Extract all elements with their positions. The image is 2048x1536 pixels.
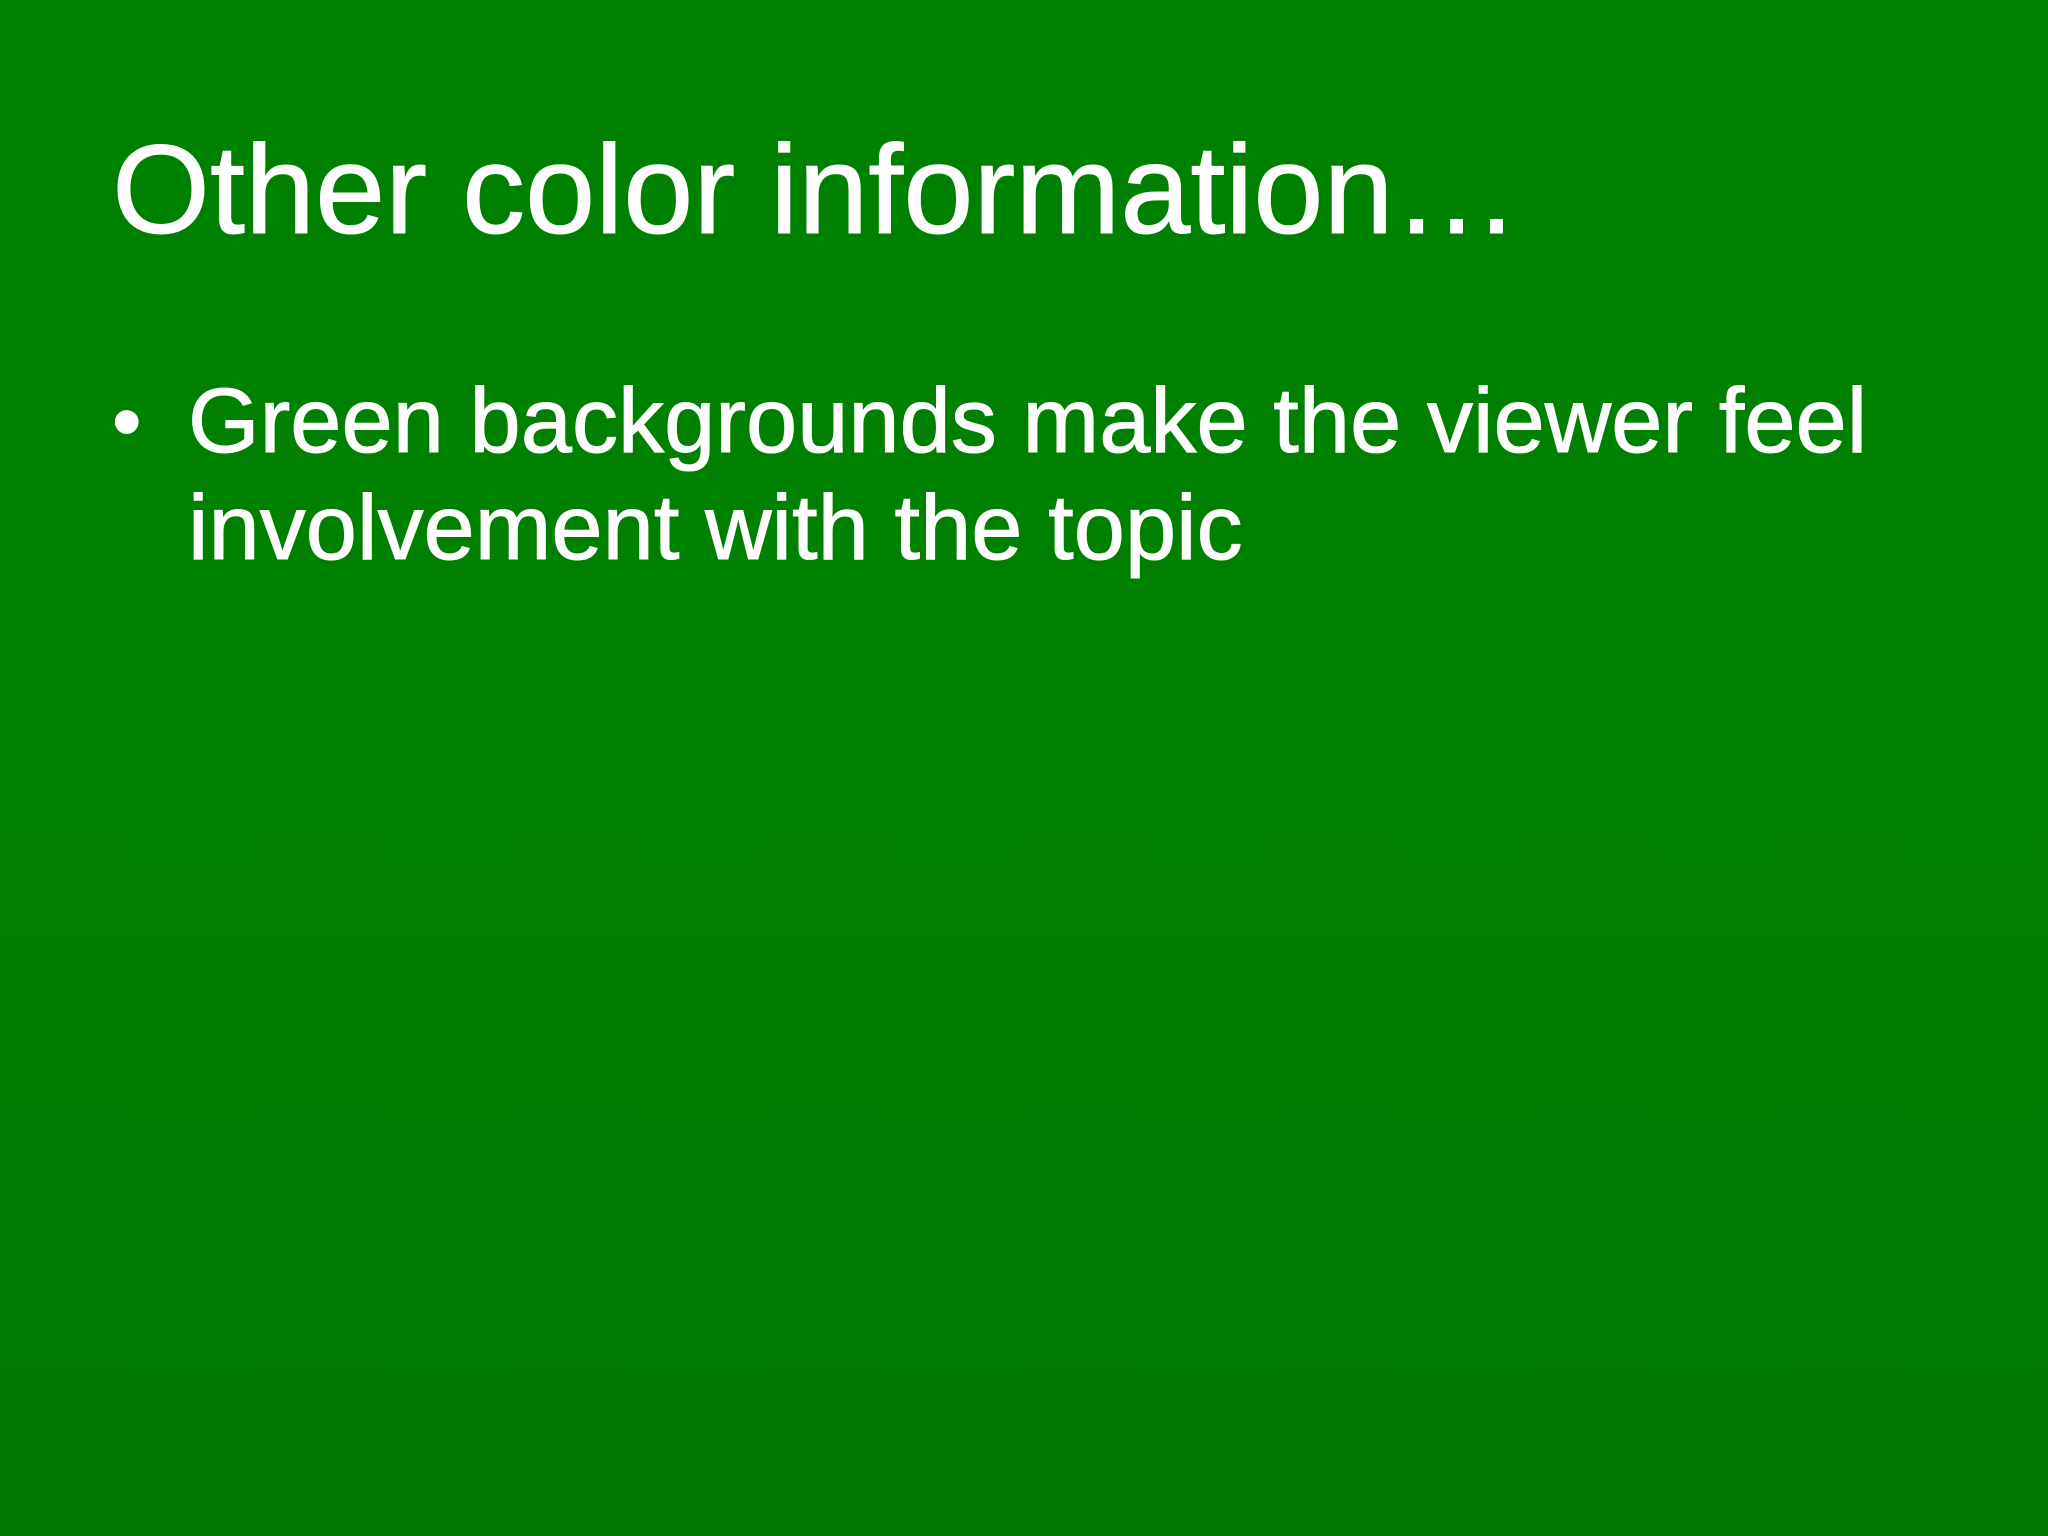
bullet text — [188, 370, 1867, 579]
bullet text: Green backgrounds make the viewer feel — [188, 370, 1867, 472]
title: Other color information… — [112, 119, 1520, 260]
bullet marker: • — [112, 374, 141, 468]
bullet text: involvement with the topic — [188, 477, 1243, 579]
bullet list — [112, 370, 1867, 579]
